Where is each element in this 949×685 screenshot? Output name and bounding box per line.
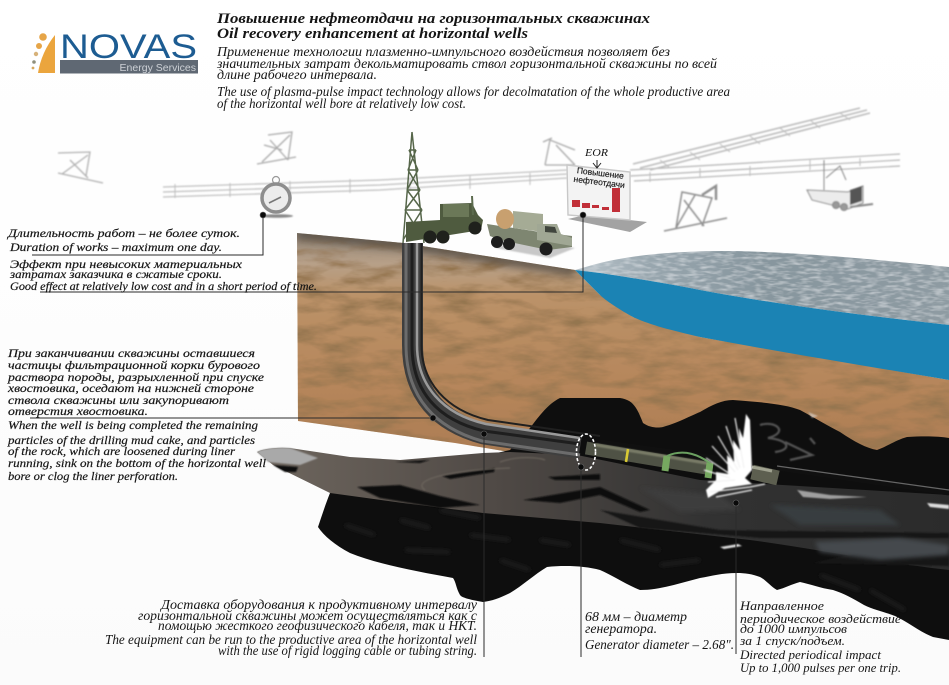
callout: well completion: of the rock, which are loosened during liner bbox=[8, 444, 235, 458]
callout: directed impact bbox=[739, 598, 901, 675]
callout: equipment delivery: with the use of rigid logging cable or tubing string. bbox=[218, 643, 477, 658]
lower rock streaks bbox=[345, 510, 905, 610]
callout: equipment delivery bbox=[105, 597, 477, 658]
callout: well completion: раствора породы, разрыхленной при спуске bbox=[7, 370, 265, 384]
plasma discharge burst bbox=[704, 414, 765, 498]
dashed ring bbox=[576, 434, 596, 470]
callout: directed impact: Directed periodical impact bbox=[739, 647, 881, 662]
intro text: значительных затрат декольматировать ствол горизонтальной скважины по всей bbox=[216, 56, 717, 71]
black rock bbox=[318, 398, 949, 640]
callout: equipment delivery: горизонтальной скважины может осуществляться как с bbox=[138, 608, 477, 623]
callout: well completion: частицы фильтрационной корки бурового bbox=[8, 358, 260, 372]
pumpjack 1 bbox=[58, 152, 103, 183]
callout: well completion: running, sink on the bottom of the horizontal well bbox=[8, 456, 267, 470]
logo: Novas Energy Services bbox=[32, 28, 198, 74]
reservoir lens bbox=[257, 448, 949, 570]
pipeline bbox=[163, 108, 900, 198]
water: lake surface bbox=[575, 251, 949, 325]
EOR label: EOR bbox=[584, 147, 608, 159]
callout: generator diameter: генератора. bbox=[585, 621, 657, 636]
callout: well completion: bore or clog the liner perforation. bbox=[8, 469, 178, 483]
pumpjack 3 bbox=[543, 138, 575, 165]
billboard label bbox=[573, 165, 627, 190]
water: deep blue edge bbox=[575, 270, 949, 380]
bars bbox=[572, 188, 620, 212]
callout: well completion: При заканчивании скважины оставшиеся bbox=[7, 346, 255, 360]
callout: generator diameter bbox=[585, 609, 734, 652]
stopwatch bbox=[261, 176, 293, 218]
heading bbox=[216, 11, 650, 42]
callout dots bbox=[260, 212, 739, 506]
heading: Повышение нефтеотдачи на горизонтальных скважинах bbox=[216, 11, 650, 27]
background oilfield: pipeline and pumpjacks bbox=[58, 108, 900, 231]
callout: equipment delivery: The equipment can be run to the productive area of the horizontal well bbox=[105, 632, 477, 647]
yellow band bbox=[626, 449, 628, 462]
green derrick truck bbox=[406, 196, 483, 244]
logo subtitle: Energy Services bbox=[120, 62, 196, 74]
grey patches bbox=[640, 488, 949, 560]
callout: directed impact: Up to 1,000 pulses per one trip. bbox=[740, 660, 901, 675]
callout: good effect bbox=[9, 257, 317, 293]
oil reservoir bbox=[257, 398, 949, 640]
smoky swirls bbox=[760, 424, 815, 460]
billboard label: Повышение bbox=[576, 165, 625, 181]
callout: duration of works: Длительность работ – не более суток. bbox=[7, 226, 240, 240]
intro text: The use of plasma-pulse impact technology allows for decolmatation of the whole productive area bbox=[217, 84, 730, 99]
callout: generator diameter: Generator diameter – 2.68". bbox=[585, 637, 734, 652]
callout: well completion: particles of the drilling mud cake, and particles bbox=[7, 433, 255, 447]
callout: well completion: ствола скважины или закупоривают bbox=[8, 393, 229, 407]
lens dark streaks bbox=[273, 460, 949, 566]
billboard shadow bbox=[568, 215, 647, 232]
callout: well completion bbox=[7, 346, 267, 483]
pumpjack 4 bbox=[664, 186, 727, 231]
well bore pipe bbox=[406, 243, 949, 493]
pipe beyond tool bbox=[600, 442, 949, 493]
lens highlight bbox=[257, 448, 318, 465]
billboard: EOR sign bbox=[567, 147, 647, 232]
soil dark surface band bbox=[297, 233, 575, 270]
callout: directed impact: до 1000 импульсов bbox=[740, 621, 847, 636]
lens ripples bbox=[422, 458, 545, 490]
callout lines bbox=[30, 215, 736, 657]
heading: Oil recovery enhancement at horizontal wells bbox=[217, 26, 528, 42]
intro text: of the horizontal well bore at relatively low cost. bbox=[217, 96, 466, 111]
crane truck bbox=[807, 160, 873, 210]
callout: duration of works bbox=[7, 226, 240, 254]
soil cross-section bbox=[297, 233, 949, 452]
callout: directed impact: Направленное bbox=[739, 598, 824, 613]
pumpjack 2 bbox=[257, 132, 296, 164]
callout: good effect: Эффект при невысоких материальных bbox=[10, 257, 243, 271]
callout: well completion: When the well is being completed the remaining bbox=[8, 418, 258, 432]
callout: good effect: Good effect at relatively low cost and in a short period of time. bbox=[10, 279, 317, 293]
intro text: Применение технологии плазменно-импульсного воздействия позволяет без bbox=[216, 44, 670, 59]
green clamps bbox=[665, 456, 710, 478]
callout: directed impact: периодическое воздействие bbox=[740, 611, 901, 626]
billboard panel bbox=[567, 165, 630, 220]
callout: generator diameter: 68 мм – диаметр bbox=[585, 609, 687, 624]
shadow bbox=[495, 240, 575, 258]
billboard label: нефтеотдачи bbox=[573, 174, 626, 190]
reservoir white glints bbox=[720, 412, 949, 549]
intro text: длине рабочего интервала. bbox=[217, 67, 377, 82]
callout: directed impact: за 1 спуск/подъем. bbox=[739, 633, 845, 648]
transport truck with cable drum bbox=[487, 209, 575, 258]
derrick bbox=[403, 132, 424, 243]
logo wordmark: NOVAS bbox=[60, 28, 197, 66]
callout: equipment delivery: Доставка оборудования к продуктивному интервалу bbox=[159, 597, 477, 612]
callout: well completion: отверстия хвостовика. bbox=[8, 404, 148, 418]
icon: orange wing bbox=[38, 35, 55, 73]
logo bar bbox=[60, 60, 198, 74]
arrow bbox=[593, 160, 601, 168]
callout: duration of works: Duration of works – maximum one day. bbox=[9, 240, 222, 254]
intro text bbox=[216, 44, 730, 111]
generator tool bbox=[576, 434, 778, 478]
callout: well completion: хвостовика, оседают на нижней стороне bbox=[7, 381, 255, 395]
callout: equipment delivery: помощью жесткого геофизического кабеля, так и НКТ. bbox=[158, 618, 477, 633]
nozzle bbox=[752, 472, 778, 478]
callout: good effect: затратах заказчика в сжатые сроки. bbox=[9, 267, 222, 281]
